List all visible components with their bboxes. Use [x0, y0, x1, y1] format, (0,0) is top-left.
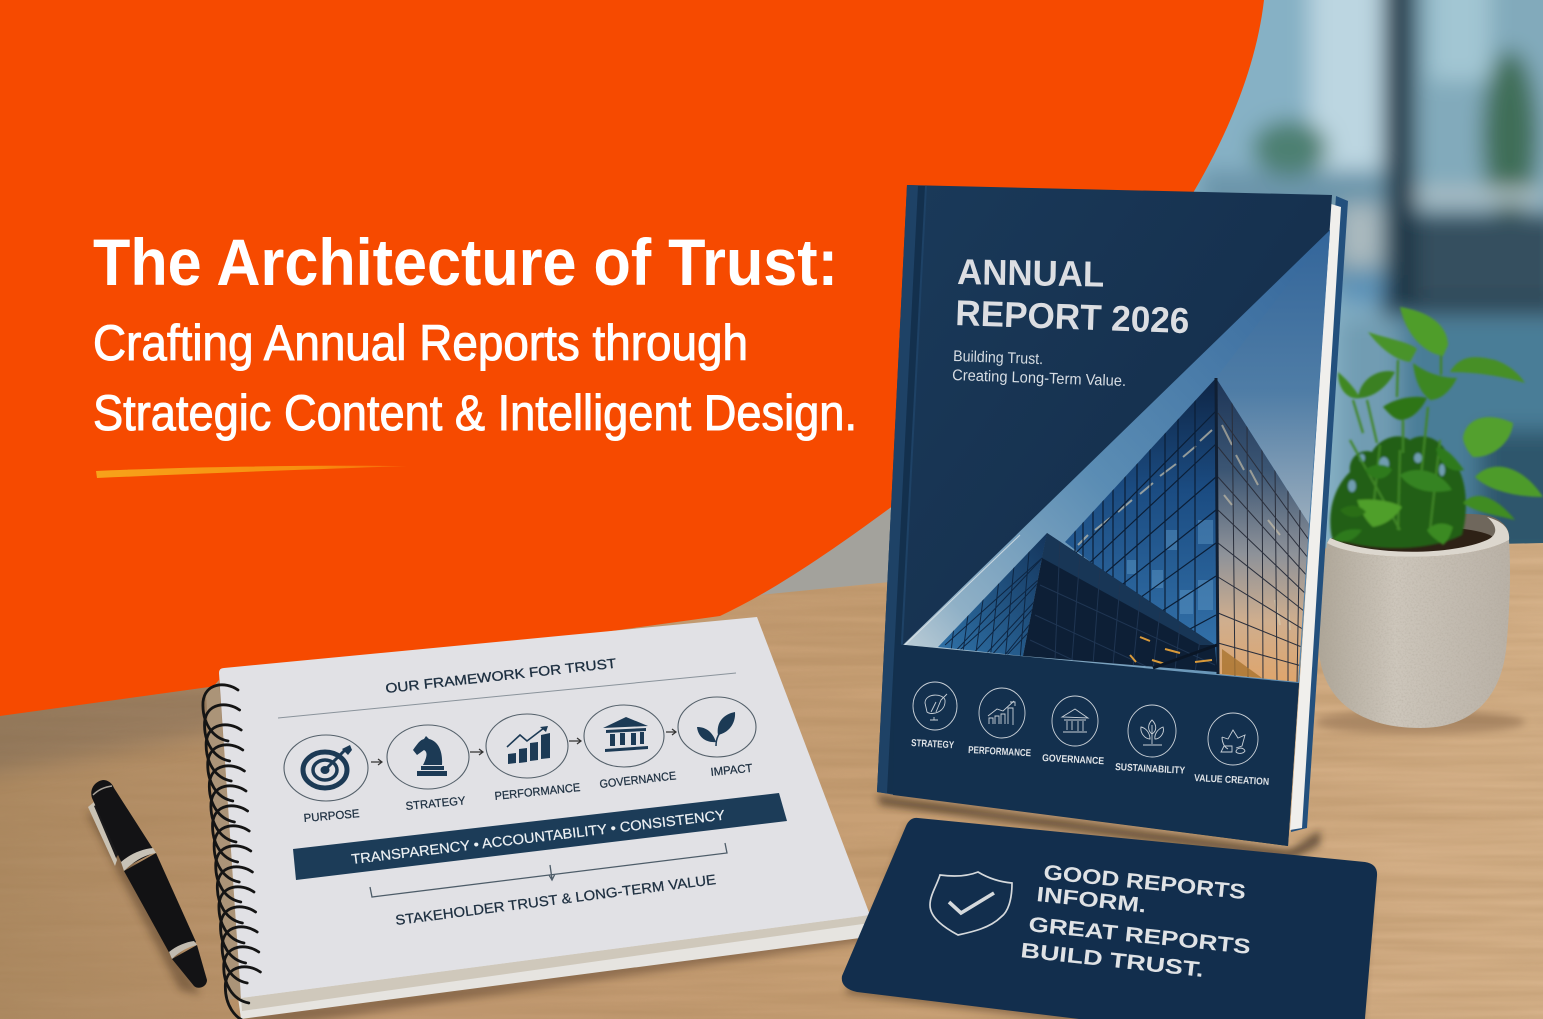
values banner: TRANSPARENCY • ACCOUNTABILITY • CONSISTENCY	[350, 806, 726, 867]
foliage	[1330, 307, 1543, 548]
stakeholder outcome: STAKEHOLDER TRUST & LONG-TERM VALUE	[394, 871, 717, 928]
silver clip	[88, 802, 117, 866]
flow diagram	[284, 697, 756, 825]
bracket with arrow	[370, 843, 727, 897]
icon: value creation	[1208, 713, 1258, 765]
back cover	[1291, 196, 1348, 832]
cover band labels: VALUE CREATION	[1194, 773, 1269, 788]
card quote text: GOOD REPORTS	[1043, 861, 1247, 904]
cover heading: ANNUAL	[957, 251, 1105, 295]
page block	[1290, 204, 1341, 830]
pot shadow	[1315, 710, 1525, 734]
cover heading: REPORT 2026	[955, 292, 1190, 341]
icon: strategy	[913, 682, 957, 730]
pot speckle	[1366, 556, 1475, 726]
silver ring	[121, 848, 156, 871]
step: governance: GOVERNANCE	[599, 770, 677, 791]
sky right of building	[1216, 230, 1330, 524]
cover tagline: Building Trust.	[953, 348, 1043, 368]
cover band labels	[911, 738, 1269, 788]
plant in pot	[1315, 307, 1543, 734]
card quote text: BUILD TRUST.	[1019, 939, 1205, 982]
pen cap	[91, 780, 155, 868]
cover band labels: PERFORMANCE	[968, 745, 1032, 759]
arrow	[470, 749, 483, 755]
pen	[85, 780, 207, 995]
cover tagline	[952, 348, 1126, 390]
step: impact	[678, 697, 756, 779]
icon: sustainability	[1128, 705, 1176, 757]
left page edge	[206, 680, 241, 1000]
sky edge highlight	[905, 535, 1020, 645]
pen tip	[172, 945, 207, 988]
title: The Architecture of Trust:	[93, 225, 838, 299]
pot body	[1319, 540, 1510, 728]
navy quote card	[842, 818, 1377, 1019]
subtitle line 1: Crafting Annual Reports through	[93, 315, 748, 371]
card quote text	[1019, 861, 1252, 982]
main building left face	[1065, 378, 1217, 660]
dark block top strip	[1042, 533, 1215, 645]
pot rim	[1327, 517, 1509, 557]
card quote text: GREAT REPORTS	[1027, 913, 1252, 959]
corner pillar	[1216, 378, 1218, 674]
arrow	[666, 729, 676, 735]
lower ring	[169, 941, 197, 959]
card quote text: INFORM.	[1035, 883, 1147, 917]
soil	[1335, 526, 1495, 554]
step: performance	[486, 714, 581, 803]
brush underline	[96, 466, 407, 478]
window grid left	[1074, 400, 1216, 632]
blurred office window background	[1130, 0, 1543, 600]
step: strategy	[387, 725, 469, 813]
headline block	[93, 225, 857, 441]
notebook shadow	[241, 925, 880, 1019]
sky triangle	[903, 230, 1330, 684]
barrel	[124, 853, 196, 956]
cover heading	[955, 251, 1190, 341]
card body	[842, 818, 1377, 1019]
spiral notebook	[203, 617, 880, 1019]
step: purpose: PURPOSE	[303, 808, 360, 825]
top page	[219, 617, 870, 998]
cover tagline: Creating Long-Term Value.	[952, 367, 1126, 390]
spine hinge strip	[877, 185, 927, 795]
cover band icons	[913, 682, 1258, 765]
icon: governance	[1052, 696, 1098, 746]
hardcover annual report book	[877, 185, 1348, 860]
wooden table	[0, 543, 1543, 1019]
window streaks right	[1222, 425, 1290, 630]
title rule	[278, 673, 736, 718]
spiral binding	[203, 685, 260, 1019]
orange blob background shape	[0, 0, 1264, 716]
pot interior	[1327, 514, 1509, 557]
arrow	[371, 759, 382, 765]
dark foliage mass	[1330, 436, 1466, 548]
notebook title: OUR FRAMEWORK FOR TRUST	[385, 656, 617, 696]
cover band labels: SUSTAINABILITY	[1115, 762, 1186, 777]
values banner	[293, 793, 787, 880]
step: governance	[584, 705, 677, 791]
front cover	[877, 185, 1332, 846]
window reflections left	[1078, 430, 1212, 545]
building	[938, 378, 1309, 682]
main building right face	[1216, 378, 1309, 682]
cover band labels: GOVERNANCE	[1042, 753, 1105, 767]
page stack and back cover	[237, 915, 872, 1019]
lit windows	[1130, 637, 1212, 664]
card shadow	[845, 824, 1372, 1019]
arrow	[569, 738, 581, 744]
left wing	[938, 533, 1047, 656]
lit amber lobby	[1222, 649, 1262, 678]
dark block	[1023, 533, 1217, 672]
icon: performance	[979, 688, 1025, 738]
step: performance: PERFORMANCE	[494, 782, 581, 803]
cap top band	[93, 786, 112, 795]
book shadow	[877, 795, 1320, 860]
cover band labels: STRATEGY	[911, 738, 955, 751]
window grid right	[1218, 392, 1309, 684]
pen shadow	[85, 810, 200, 995]
grey background wall behind the table	[700, 490, 900, 630]
subtitle line 2: Strategic Content & Intelligent Design.	[93, 385, 857, 441]
dark block grid	[1030, 540, 1215, 672]
step: strategy: STRATEGY	[405, 795, 466, 813]
gaps between leaves	[1348, 453, 1445, 492]
step: purpose	[284, 735, 368, 825]
bottom navy band	[893, 644, 1299, 846]
icon: shield with check	[930, 872, 1012, 935]
step: impact: IMPACT	[710, 763, 753, 779]
stems	[1350, 355, 1441, 530]
